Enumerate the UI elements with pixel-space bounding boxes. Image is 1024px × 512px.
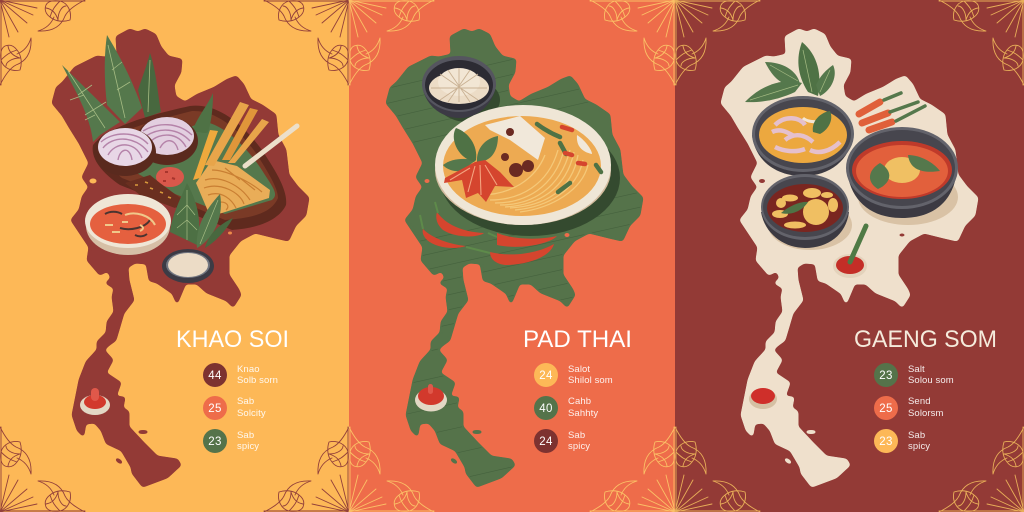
title: PAD THAI: [523, 326, 632, 353]
bowl: red curry: [846, 127, 958, 225]
chopstick: [245, 126, 297, 166]
panel: Pad Thai: [349, 0, 675, 512]
map of Thailand in cream: [722, 30, 977, 486]
legend row 1: Shilol som: [568, 375, 613, 386]
soup bowl: [85, 194, 171, 255]
banana leaves: [62, 35, 161, 142]
leaf stripes: [387, 60, 640, 477]
legend row 3: [203, 429, 259, 453]
panel background: orange: [349, 0, 675, 512]
legend row 2: [534, 396, 598, 420]
title: KHAO SOI: [176, 326, 289, 353]
legend row 3: 23: [879, 436, 893, 448]
wooden tray: [93, 93, 286, 230]
legend row 2: Sahhty: [568, 408, 598, 419]
panel: Gaeng Som: [675, 0, 1024, 512]
panel background: yellow: [0, 0, 349, 512]
legend row 1: [534, 363, 613, 387]
legend row 2: Cahb: [568, 396, 591, 407]
onion slices: [94, 117, 198, 176]
dipping spoon: [833, 226, 867, 278]
chilies: [420, 202, 557, 265]
legend row 1: 44: [208, 370, 222, 382]
sausage and meat: [125, 167, 184, 208]
sauce pin: [749, 388, 777, 409]
shadow of plate: [440, 120, 620, 236]
legend row 3: spicy: [237, 441, 259, 452]
legend row 2: [874, 396, 944, 420]
sauce pin: [80, 388, 110, 415]
chilies with green stems: [859, 93, 925, 130]
legend row 1: [874, 363, 954, 387]
corner ornaments: [0, 0, 349, 512]
legend row 2: Solcity: [237, 408, 266, 419]
legend row 1: Knao: [237, 364, 260, 375]
sauce pin: [415, 384, 447, 412]
legend row 1: Salt: [908, 364, 925, 375]
legend row 1: [203, 363, 278, 387]
legend row 2: 25: [208, 403, 222, 415]
legend row 2: [203, 396, 266, 420]
legend row 3: [874, 429, 930, 453]
legend row 3: 23: [208, 436, 222, 448]
legend row 3: Sab: [908, 430, 925, 441]
corner ornaments: [349, 0, 675, 512]
leaf garnish: [745, 42, 835, 102]
bowl: shrimp curry: [752, 96, 854, 176]
legend row 3: Sab: [568, 430, 585, 441]
corner ornaments: [675, 0, 1024, 512]
legend row 2: Sab: [237, 396, 254, 407]
legend row 3: [534, 429, 590, 453]
panel background: maroon: [675, 0, 1024, 512]
legend row 3: Sab: [237, 430, 254, 441]
small dipping bowl: [162, 249, 214, 283]
legend row 3: 24: [539, 436, 553, 448]
legend row 2: Solorsm: [908, 408, 944, 419]
bowl: peanuts and fish cake: [761, 174, 852, 250]
title: GAENG SOM: [854, 326, 997, 353]
legend row 3: spicy: [908, 441, 930, 452]
noodle plate: [435, 105, 611, 225]
map of Thailand as banana leaf: [387, 30, 642, 486]
legend row 2: 25: [879, 403, 893, 415]
legend row 1: 23: [879, 370, 893, 382]
map of Thailand in maroon: [53, 30, 308, 486]
crispy noodles and sticks: [193, 102, 270, 216]
legend row 1: Solb sorn: [237, 375, 278, 386]
basil and red garnish: [443, 128, 534, 202]
legend row 3: spicy: [568, 441, 590, 452]
legend row 1: 24: [539, 370, 553, 382]
legend row 1: Salot: [568, 364, 590, 375]
bottom leaves: [170, 183, 233, 248]
legend row 2: Send: [908, 396, 931, 407]
legend row 1: Solou som: [908, 375, 954, 386]
legend row 2: 40: [539, 403, 553, 415]
dark bowl of dumplings: [422, 56, 500, 122]
panel: Khao Soi: [0, 0, 349, 512]
